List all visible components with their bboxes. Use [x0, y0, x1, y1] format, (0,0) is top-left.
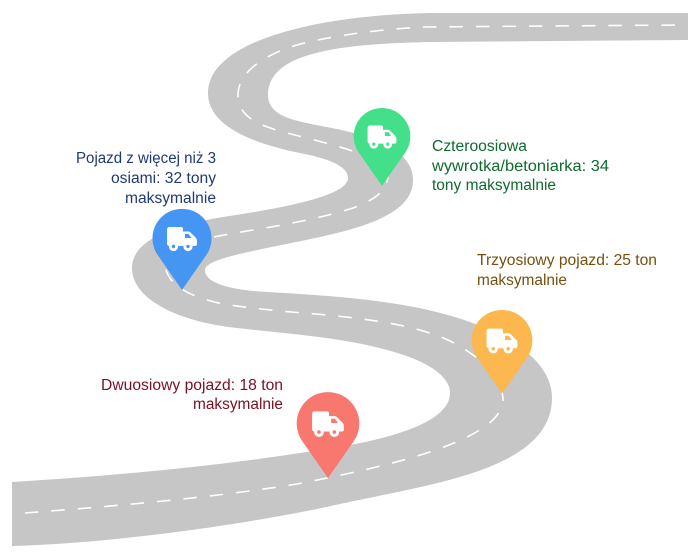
label: three-axle vehicle: Trzyosiowy pojazd: 25 ton — [477, 252, 657, 269]
label: three-axle vehicle — [477, 252, 657, 289]
label: vehicle with more than 3 axles: maksymalnie — [125, 190, 216, 207]
label: four-axle tipper or concrete mixer: Czteroosiowa — [432, 138, 527, 155]
pin: orange truck marker — [472, 310, 532, 394]
pin: green truck marker — [354, 108, 410, 186]
label: vehicle with more than 3 axles — [76, 150, 216, 207]
label: four-axle tipper or concrete mixer — [431, 138, 609, 194]
label: three-axle vehicle: maksymalnie — [477, 272, 567, 289]
pin: red truck marker — [297, 392, 359, 478]
label: four-axle tipper or concrete mixer: wywrotka/betoniarka: 34 — [431, 158, 609, 175]
label: two-axle vehicle: maksymalnie — [193, 396, 283, 413]
label: four-axle tipper or concrete mixer: tony maksymalnie — [432, 177, 556, 194]
pin: blue truck marker — [152, 209, 212, 290]
label: vehicle with more than 3 axles: Pojazd z więcej niż 3 — [76, 150, 216, 167]
label: two-axle vehicle: Dwuosiowy pojazd: 18 ton — [101, 377, 283, 394]
label: vehicle with more than 3 axles: osiami: 32 tony — [111, 170, 216, 187]
label: two-axle vehicle — [101, 377, 283, 413]
